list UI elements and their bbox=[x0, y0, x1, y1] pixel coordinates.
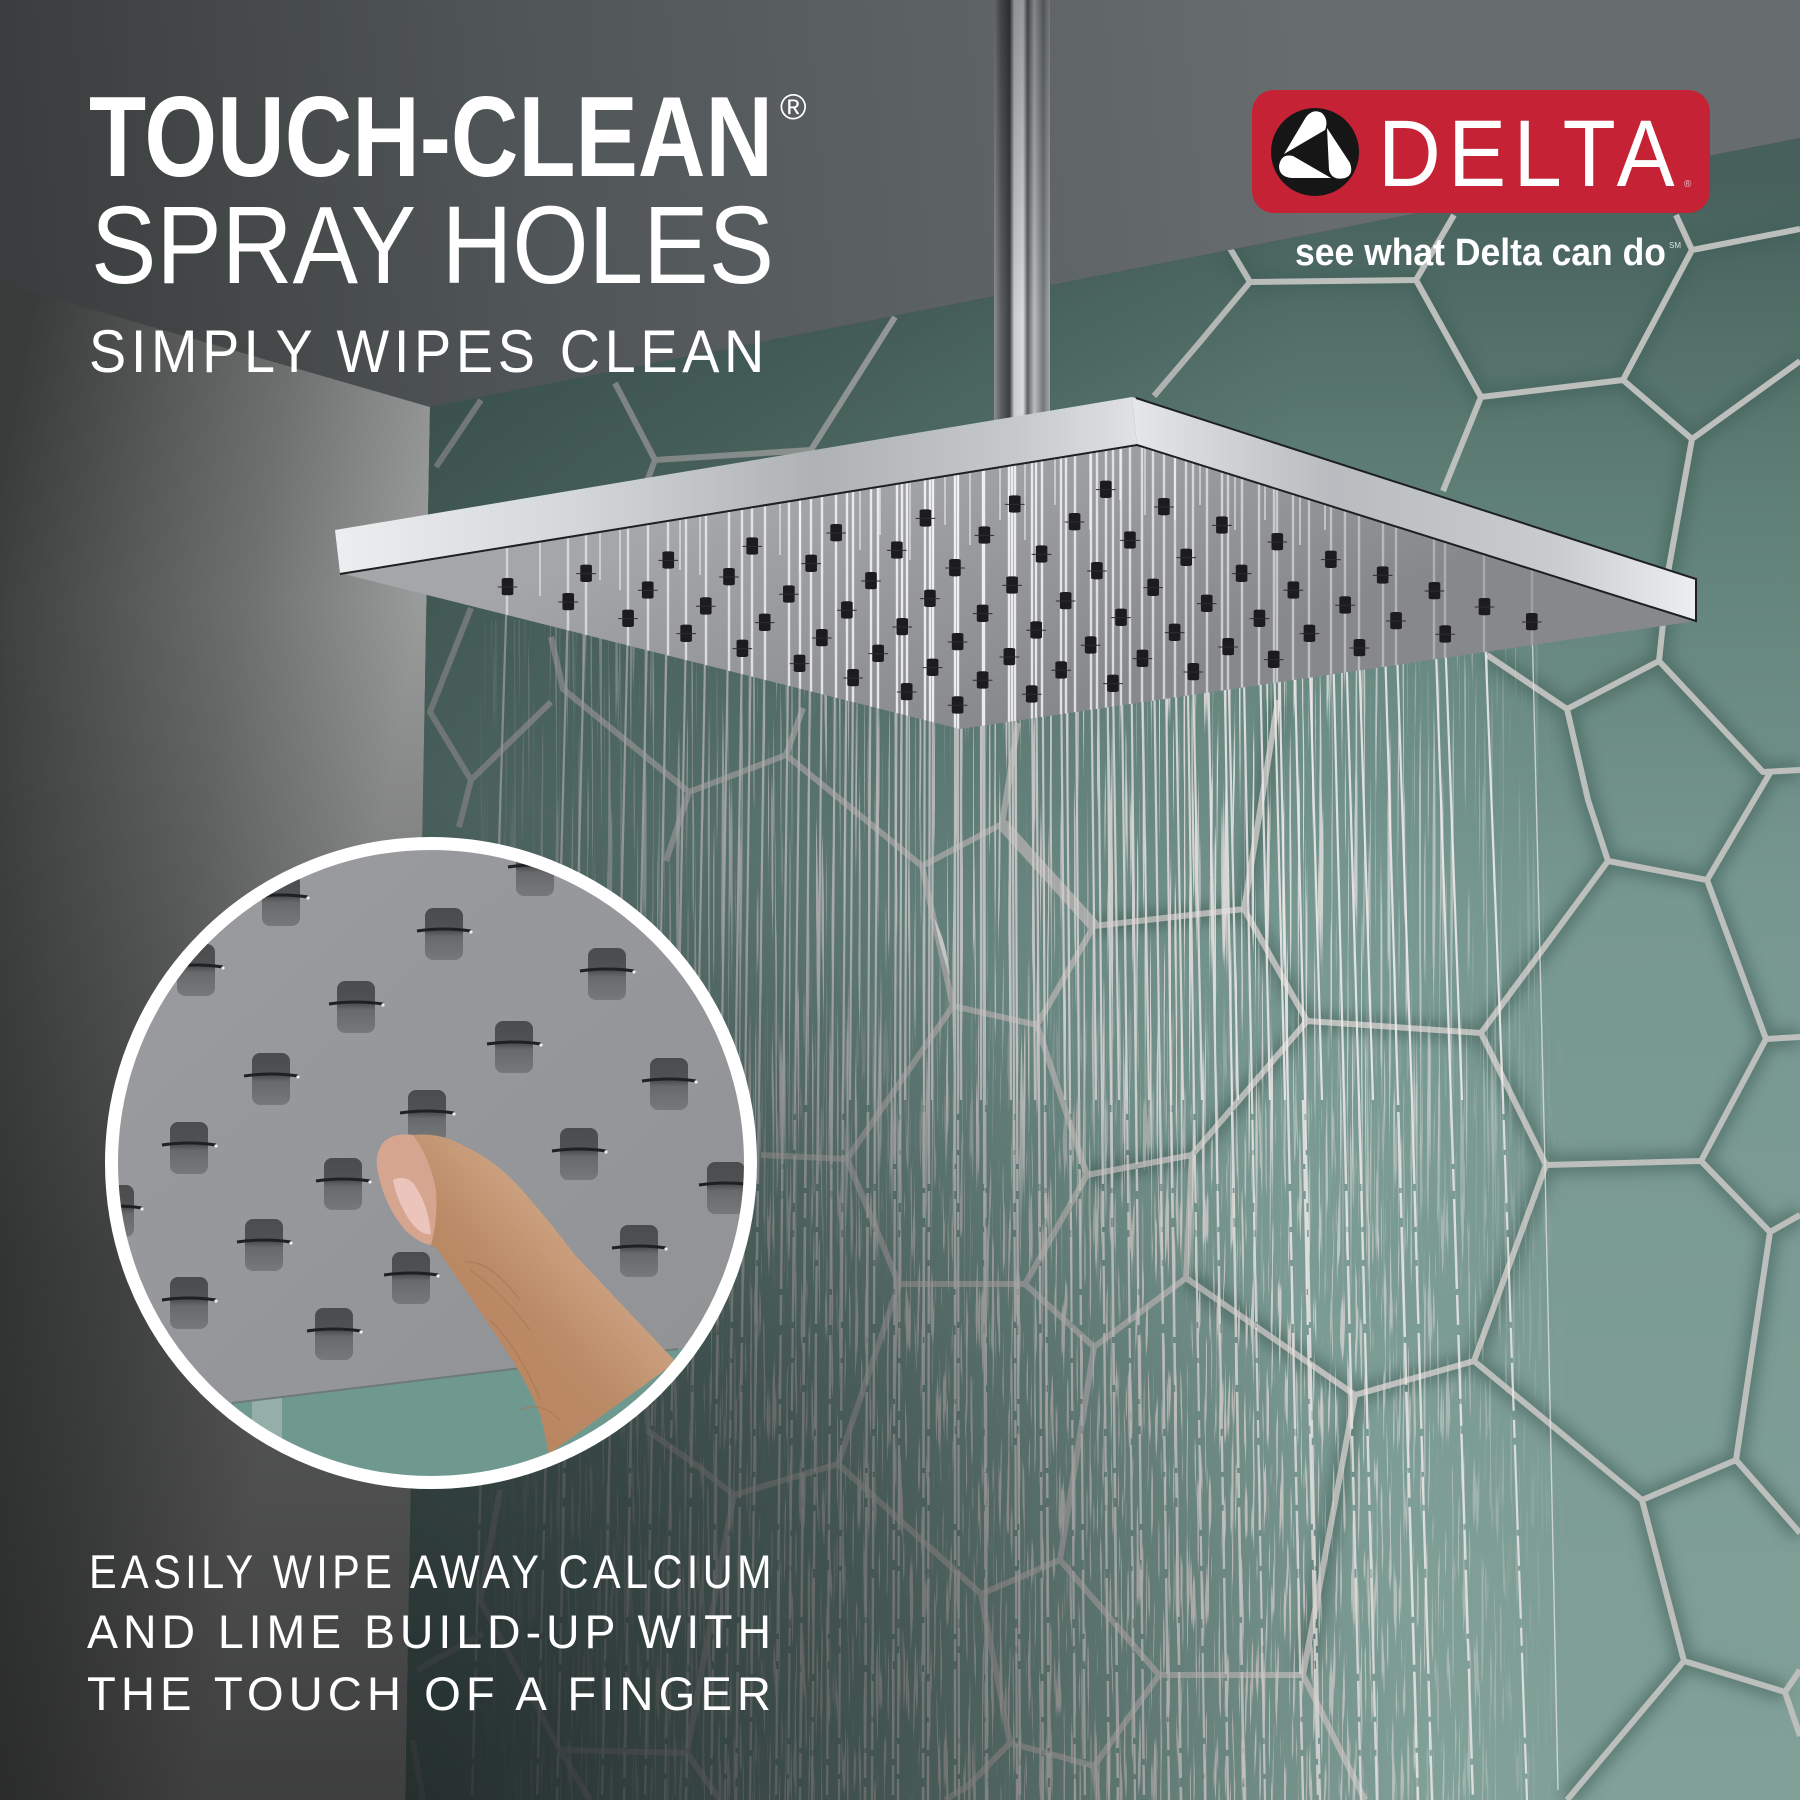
shower head bbox=[335, 397, 1697, 729]
text block: benefit description: AND LIME BUILD-UP WITH bbox=[87, 1605, 776, 1658]
callout: magnified spray holes with fingertip bbox=[88, 840, 760, 1490]
tagline: see what Delta can do bbox=[1295, 232, 1666, 274]
shower head: short runoff streaks along top edge bbox=[539, 448, 1326, 596]
background: ceiling bbox=[0, 0, 1800, 407]
rain: streams from each spray hole, upper continuous part bbox=[498, 614, 1504, 1100]
background: left wall bbox=[0, 283, 430, 1800]
title: Touch-Clean: TOUCH-CLEAN bbox=[89, 74, 773, 201]
heading: Spray Holes: SPRAY HOLES bbox=[91, 184, 774, 307]
logo: DELTA wordmark: DELTA bbox=[1378, 101, 1682, 207]
callout: enlarged holes bbox=[88, 844, 755, 1360]
rain: outermost thin stream bbox=[1532, 622, 1558, 1790]
text block: benefit description: EASILY WIPE AWAY CALCIUM bbox=[89, 1545, 776, 1598]
rain: continuous upper spray texture bbox=[480, 620, 1550, 1340]
subheading: Simply wipes clean: SIMPLY WIPES CLEAN bbox=[89, 318, 769, 385]
title: registered mark: ® bbox=[780, 86, 807, 127]
shower arm pipe bbox=[994, 0, 1050, 425]
shower head: right chrome side band bbox=[1132, 397, 1696, 621]
tagline: service mark: SM bbox=[1669, 241, 1681, 250]
background: hexagonal glass tile wall bbox=[400, 130, 1800, 1800]
rain: broken lower spray texture bbox=[524, 977, 1548, 1800]
shower head: left chrome side band bbox=[335, 397, 1137, 573]
icon: fingertip pressing spray hole bbox=[377, 1134, 676, 1454]
text block: benefit description: THE TOUCH OF A FINGER bbox=[87, 1667, 776, 1720]
shower head: water streaks on plate bbox=[506, 447, 1534, 729]
logo: registered mark: ® bbox=[1684, 179, 1692, 190]
shower head: underside plate bbox=[340, 445, 1696, 729]
callout: zoomed plate and wall bbox=[118, 850, 744, 1476]
logo: Delta red badge bbox=[1252, 90, 1710, 213]
icon: Delta triangle mark bbox=[1271, 108, 1359, 196]
text block: benefit description bbox=[87, 1545, 776, 1720]
callout: white ring bbox=[112, 844, 750, 1482]
rain: lower broken streams bbox=[472, 1100, 1527, 1800]
shower head: spray holes bbox=[498, 481, 1542, 714]
